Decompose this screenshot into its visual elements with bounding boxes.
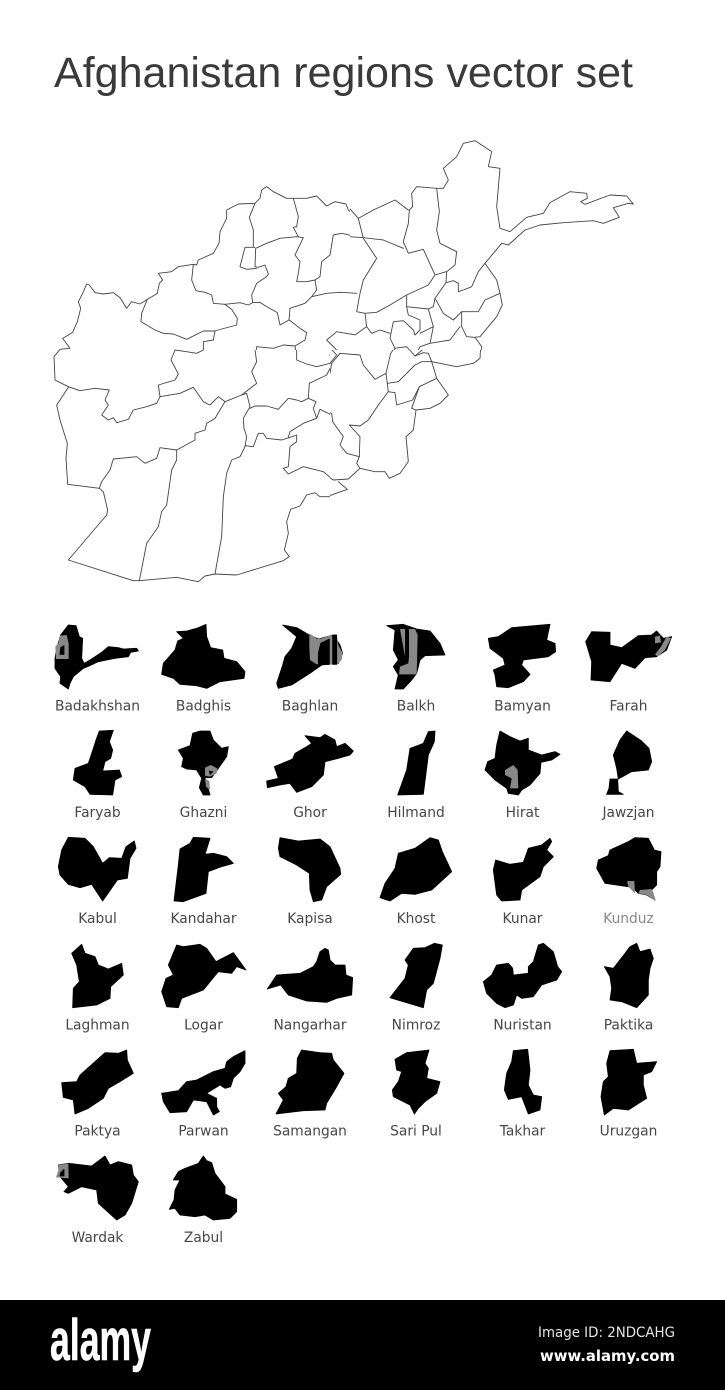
icon: Hirat (485, 731, 560, 795)
icon: Laghman (72, 944, 123, 1008)
region name labels: Jawzjan (601, 805, 655, 821)
region name labels: Badakhshan (55, 698, 140, 714)
icon: Kapisa (278, 838, 341, 902)
icon: Sari Pul (392, 1050, 440, 1114)
icon: Jawzjan (607, 731, 652, 794)
footer logo: alamy (50, 1308, 151, 1373)
region name labels: Hilmand (387, 805, 445, 821)
icon: Khost (380, 838, 452, 901)
icon: Kunar (493, 838, 553, 901)
icon: Bamyan (488, 624, 556, 688)
icon: Kabul (58, 837, 136, 901)
map section: north-east regions (350, 140, 634, 350)
footer image id: Image ID: 2NDCAHG (538, 1325, 675, 1341)
region name labels: Parwan (178, 1124, 229, 1140)
region name labels: Hirat (506, 805, 540, 821)
region name labels: Uruzgan (600, 1124, 657, 1140)
map section: south-east regions (330, 350, 481, 496)
icon: Logar (162, 944, 246, 1008)
icon: Badghis (162, 624, 245, 688)
footer bar (0, 1300, 725, 1390)
region name labels: Samangan (273, 1124, 347, 1140)
region name labels: Takhar (499, 1124, 546, 1140)
panel: silhouettes rows 1-2, columns 4-6 (387, 624, 672, 795)
region name labels: Wardak (72, 1230, 123, 1246)
icon: Faryab (73, 730, 122, 795)
icon: Nimroz (390, 943, 442, 1008)
region name labels: Logar (184, 1018, 223, 1034)
region name labels: Laghman (65, 1018, 130, 1034)
region name labels: Baghlan (282, 698, 338, 714)
region name labels: Balkh (397, 698, 435, 714)
footer website: www.alamy.com (540, 1347, 675, 1365)
icon: Nuristan (483, 943, 562, 1008)
map section: north-west regions (59, 186, 350, 350)
region name labels: Ghazni (180, 805, 227, 821)
region name labels: Kandahar (170, 911, 237, 927)
icon: Ghor (267, 734, 353, 792)
map section: south-west regions (54, 349, 357, 582)
region name labels: Nangarhar (273, 1018, 347, 1034)
region name labels: Kapisa (287, 911, 333, 927)
region name labels (55, 698, 657, 1246)
region name labels: Nuristan (493, 1018, 552, 1034)
region name labels: Faryab (74, 805, 121, 821)
panel: silhouettes rows 1-2, columns 1-3 (55, 624, 353, 795)
region name labels: Sari Pul (390, 1124, 442, 1140)
region name labels: Paktika (604, 1018, 653, 1034)
icon: Badakhshan (55, 625, 138, 689)
region name labels: Bamyan (494, 698, 551, 714)
icon: Baghlan (277, 625, 343, 688)
icon: Nangarhar (267, 948, 353, 1002)
icon: Paktya (62, 1050, 133, 1114)
panel: silhouettes rows 3-4, columns 1-3 (58, 837, 353, 1008)
icon: Uruzgan (601, 1049, 657, 1115)
icon: Samangan (276, 1050, 344, 1114)
icon: Takhar (504, 1049, 542, 1114)
icon: Farah (586, 631, 672, 682)
region name labels: Nimroz (392, 1018, 440, 1034)
title: Afghanistan regions vector set (54, 49, 633, 97)
panel: silhouettes rows 3-4, columns 4-6 (380, 838, 661, 1008)
region name labels: Paktya (74, 1124, 121, 1140)
icon: Kunduz (597, 838, 661, 901)
region name labels: Khost (397, 911, 436, 927)
icon: Ghazni (178, 731, 228, 795)
icon: Parwan (162, 1051, 245, 1115)
icon: Paktika (604, 943, 653, 1008)
panel: silhouettes row 5, columns 4-6 (392, 1049, 657, 1115)
region name labels: Zabul (184, 1230, 223, 1246)
map: Afghanistan regions outline (54, 141, 633, 582)
panel: silhouettes rows 5-6, columns 1-3 (56, 1050, 344, 1220)
region name labels: Farah (610, 698, 648, 714)
region name labels: Kunar (503, 911, 543, 927)
region name labels: Kabul (78, 911, 117, 927)
icon: Zabul (169, 1156, 237, 1220)
region name labels: Kunduz (603, 911, 654, 927)
icon: Hilmand (398, 731, 435, 795)
icon: Kandahar (174, 837, 233, 902)
icon: Balkh (387, 624, 445, 689)
region name labels: Badghis (176, 698, 231, 714)
icon: Wardak (56, 1156, 138, 1220)
region name labels: Ghor (293, 805, 327, 821)
